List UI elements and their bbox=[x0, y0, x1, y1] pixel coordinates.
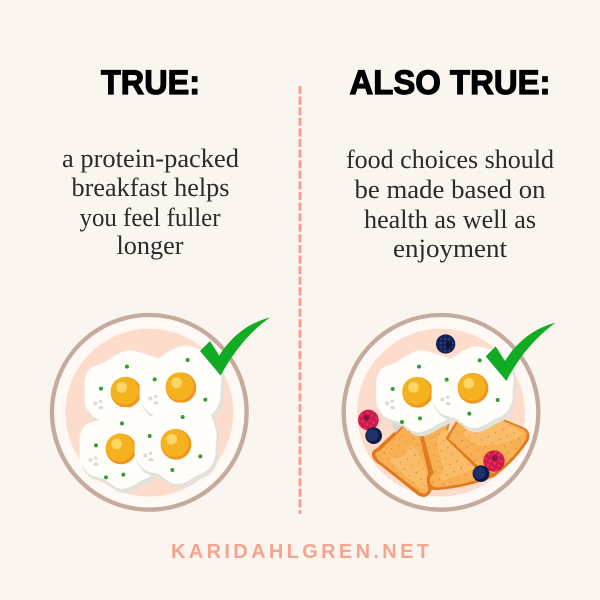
illustration: plate of four fried eggs bbox=[52, 315, 270, 510]
text block: right statement: health as well as bbox=[364, 204, 536, 234]
raspberry right bbox=[483, 450, 505, 472]
toast slice middle bbox=[421, 420, 497, 490]
heading: TRUE: TRUE: bbox=[101, 64, 200, 102]
plate bbox=[52, 315, 247, 510]
text block: left statement bbox=[62, 143, 239, 260]
footer: website: KARIDAHLGREN.NET bbox=[171, 541, 429, 563]
icon: green check mark bbox=[486, 323, 556, 381]
eggs bbox=[376, 346, 516, 436]
text block: right statement bbox=[346, 144, 554, 263]
toast slice left bbox=[372, 425, 432, 497]
text block: left statement: you feel fuller bbox=[80, 202, 221, 232]
icon: green check mark bbox=[200, 317, 270, 376]
plate bbox=[344, 315, 538, 510]
blueberry right bbox=[473, 465, 489, 482]
toast slice right bbox=[446, 418, 529, 477]
text block: right statement: food choices should bbox=[346, 144, 554, 174]
raspberry left bbox=[358, 410, 379, 430]
eggs bbox=[79, 346, 224, 493]
text block: left statement: a protein-packed bbox=[62, 143, 239, 173]
text block: right statement: be made based on bbox=[354, 174, 546, 204]
toast slices bbox=[372, 418, 529, 497]
blueberry top bbox=[436, 334, 455, 354]
text block: right statement: enjoyment bbox=[393, 233, 508, 263]
blueberry left bbox=[365, 427, 382, 444]
text block: left statement: breakfast helps bbox=[72, 172, 230, 202]
text block: left statement: longer bbox=[116, 230, 184, 260]
heading: ALSO TRUE: ALSO TRUE: bbox=[350, 64, 550, 102]
illustration: plate of eggs, toast and berries bbox=[344, 315, 556, 510]
